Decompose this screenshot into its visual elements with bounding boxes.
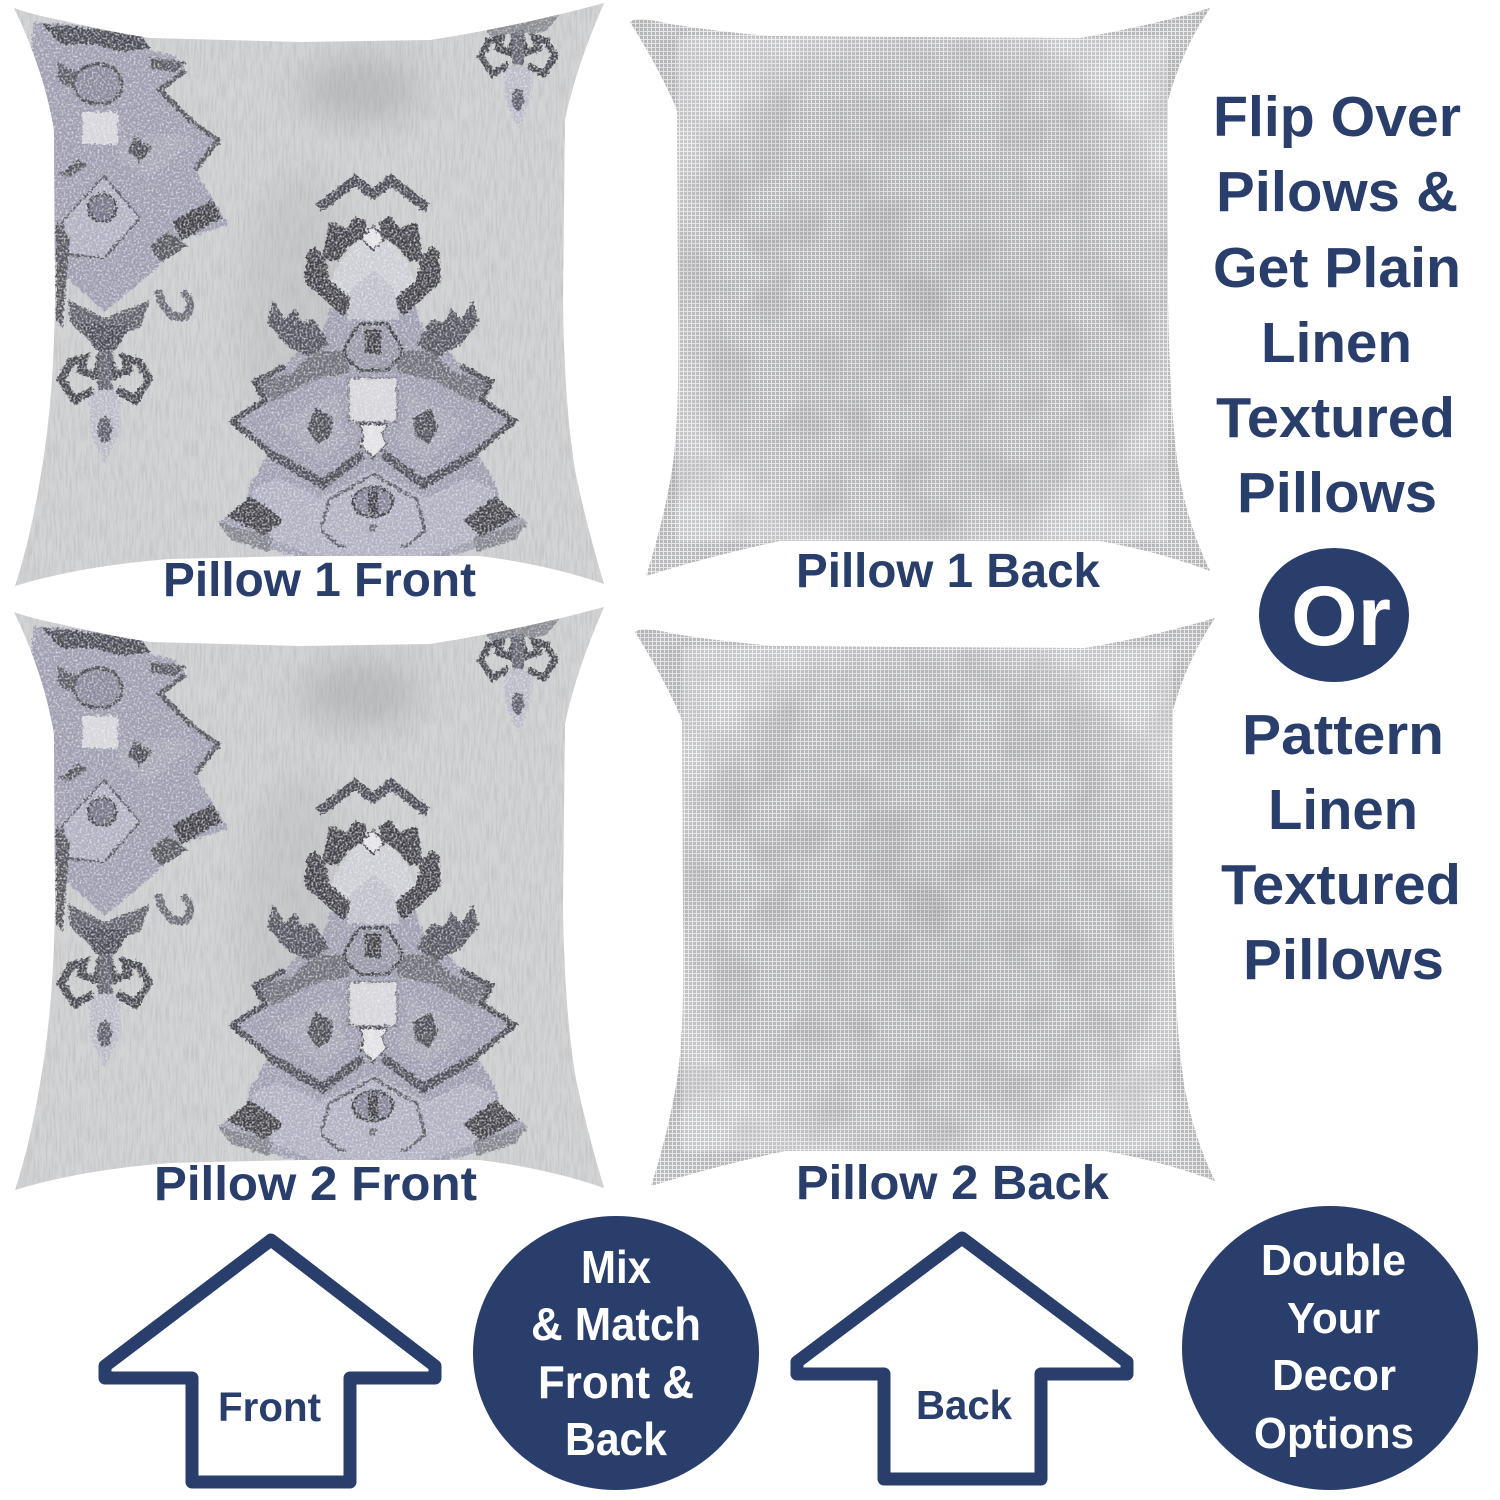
panel: pillow 1 back — [620, 0, 1220, 585]
arrow: front — [105, 1240, 435, 1482]
arrow: back — [797, 1238, 1127, 1479]
text block: pattern linen: Pattern — [1242, 703, 1444, 767]
panel: pillow 2 front — [0, 604, 620, 1204]
text block: flip over heading: Textured — [1216, 386, 1455, 450]
text block: flip over heading: Flip Over — [1213, 85, 1461, 149]
label: pillow 2 back: Pillow 2 Back — [796, 1157, 1109, 1210]
text block: flip over heading — [1213, 85, 1461, 525]
badge: mix and match: Front & — [538, 1356, 694, 1408]
text block: flip over heading: Linen — [1261, 311, 1412, 375]
text block: pattern linen: Linen — [1268, 778, 1418, 842]
badge: mix and match: Mix — [581, 1241, 651, 1293]
badge: double your decor — [1182, 1206, 1478, 1490]
text block: flip over heading: Pilows & — [1216, 160, 1458, 224]
badge: or: Or — [1291, 569, 1391, 663]
arrow: front: Front — [218, 1384, 321, 1430]
badge: double your decor: Your — [1287, 1294, 1380, 1343]
badge: double your decor: Double — [1261, 1236, 1406, 1285]
text block: pattern linen — [1221, 703, 1461, 992]
text block: flip over heading: Get Plain — [1213, 236, 1461, 300]
label: pillow 1 front: Pillow 1 Front — [163, 554, 476, 607]
badge: double your decor: Decor — [1272, 1351, 1396, 1400]
label: pillow 2 front: Pillow 2 Front — [154, 1158, 477, 1211]
arrow: back: Back — [916, 1382, 1012, 1428]
badge: mix and match — [473, 1216, 759, 1490]
text block: flip over heading: Pillows — [1237, 461, 1437, 525]
text block: pattern linen: Pillows — [1243, 928, 1444, 992]
text block: pattern linen: Textured — [1221, 853, 1461, 917]
badge: or — [1259, 548, 1409, 682]
badge: mix and match: Back — [565, 1413, 667, 1465]
panel: pillow 2 back — [625, 610, 1225, 1195]
label: pillow 1 back: Pillow 1 Back — [796, 545, 1100, 598]
badge: double your decor: Options — [1254, 1409, 1414, 1458]
panel: pillow 1 front — [0, 0, 620, 600]
badge: mix and match: & Match — [531, 1298, 701, 1350]
